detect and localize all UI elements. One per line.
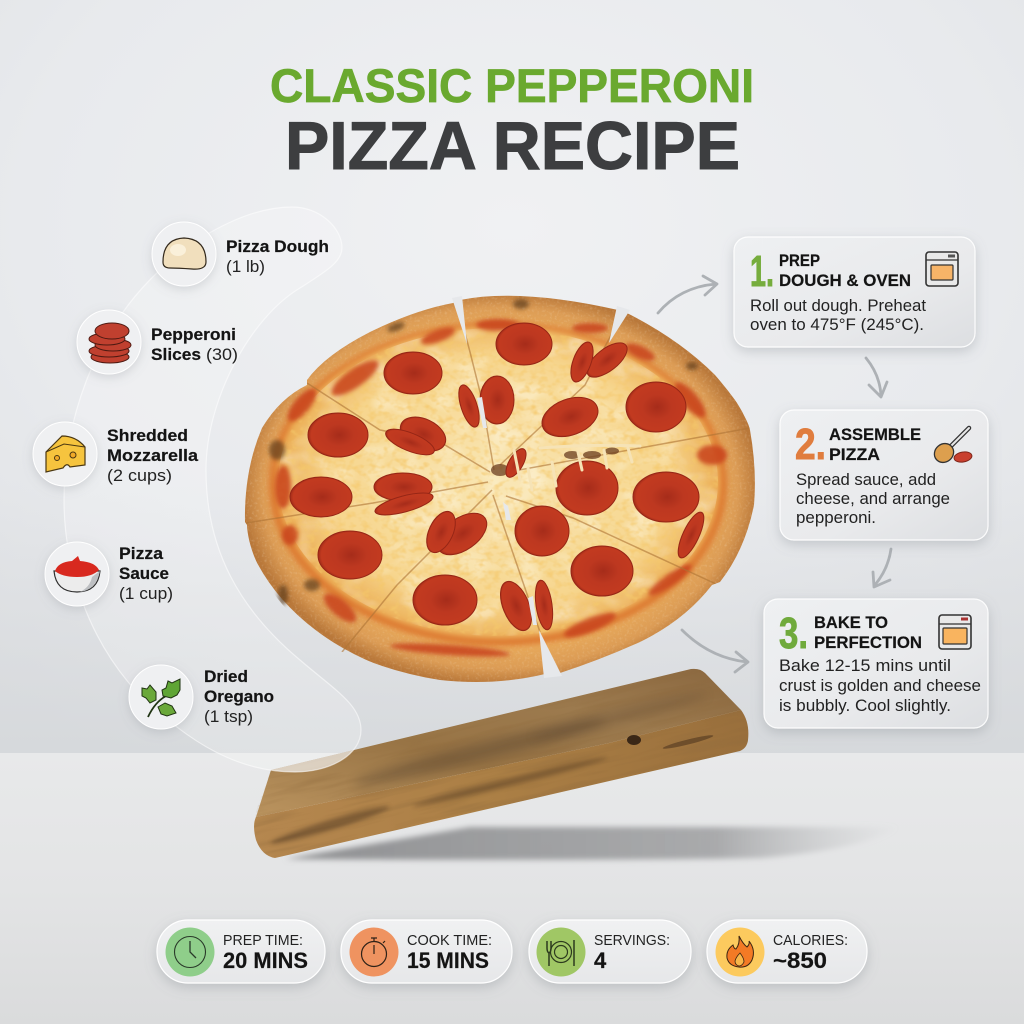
text: SERVINGS:: [594, 933, 670, 949]
text: ~850: [773, 948, 827, 973]
pepperoni slices: [290, 323, 709, 635]
step 3 text: Bake 12-15 mins until: [779, 657, 951, 675]
rim notches between slices: [452, 296, 630, 678]
icon: oven: [926, 252, 958, 286]
sauce patches: [275, 319, 727, 659]
translucent ingredient ribbon: [64, 207, 361, 772]
label: Pizza: [119, 545, 164, 563]
panel: step 2: [780, 410, 988, 540]
ingredient: pizza dough: [152, 222, 329, 286]
step 1 heading: PREP: [779, 252, 820, 270]
text: PREP TIME:: [223, 933, 303, 949]
ingredient: oregano: [129, 665, 274, 729]
panel: step 1: [734, 237, 975, 347]
stat: prep time: [157, 920, 325, 983]
step 2 text: pepperoni.: [796, 509, 876, 527]
ingredient: mozzarella: [33, 422, 199, 486]
text: COOK TIME:: [407, 933, 492, 949]
label: (1 cup): [119, 585, 173, 603]
icon: spoon with pepperoni: [931, 428, 973, 466]
floor shadow under board: [285, 827, 900, 860]
arrow: pizza to step 1: [658, 276, 717, 313]
arrow: step 2 to step 3: [873, 549, 891, 587]
step 1 heading: DOUGH & OVEN: [779, 272, 911, 290]
step 3 heading: BAKE TO: [814, 614, 888, 632]
cheese: [276, 326, 720, 638]
step 1 number: 1.: [750, 247, 774, 296]
ingredient: sauce: [45, 542, 173, 606]
char marks: [269, 299, 698, 605]
sauce ring: [269, 322, 727, 646]
title line: classic pepperoni: CLASSIC PEPPERONI: [270, 59, 754, 112]
step 2 heading: PIZZA: [829, 446, 880, 464]
panel: step 3: [764, 599, 988, 728]
icon: flame: [716, 928, 764, 976]
icon: stopwatch: [350, 928, 398, 976]
label: Mozzarella: [107, 447, 199, 465]
label: Shredded: [107, 427, 188, 445]
step 3 text: crust is golden and cheese: [779, 677, 981, 695]
cutting board: [254, 668, 748, 858]
frosted ribbon over board: [271, 750, 353, 772]
step 1 text: Roll out dough. Preheat: [750, 297, 926, 315]
arrow: step 1 to step 2: [866, 358, 887, 397]
board front edge: [254, 710, 748, 858]
cheese mottling: [279, 328, 718, 636]
text: CALORIES:: [773, 933, 848, 949]
label: Pepperoni: [151, 326, 236, 344]
label: (2 cups): [107, 467, 172, 485]
label: Dried: [204, 668, 248, 686]
text: 15 MINS: [407, 948, 489, 973]
step 2 number: 2.: [795, 420, 826, 469]
icon: pepperoni stack: [89, 323, 131, 363]
step 3 number: 3.: [779, 609, 808, 658]
icon: clock: [166, 928, 214, 976]
label: Sauce: [119, 565, 169, 583]
title line: pizza recipe: PIZZA RECIPE: [285, 108, 740, 184]
background wall: [0, 0, 1024, 753]
text: 4: [594, 948, 607, 973]
icon: oregano sprig: [142, 679, 180, 717]
step 2 text: Spread sauce, add: [796, 471, 936, 489]
step 3 heading: PERFECTION: [814, 634, 922, 652]
stat: servings: [529, 920, 691, 983]
melted cheese strands: [514, 445, 640, 490]
arrow: pizza to step 3: [682, 630, 748, 672]
icon: dough: [163, 238, 206, 269]
step 2 heading: ASSEMBLE: [829, 426, 921, 444]
text: 20 MINS: [223, 948, 308, 973]
label: (1 tsp): [204, 708, 253, 726]
step 2 text: cheese, and arrange: [796, 490, 950, 508]
label: Oregano: [204, 688, 274, 706]
label: Pizza Dough: [226, 238, 329, 256]
icon: plate and cutlery: [536, 928, 586, 976]
board top face: [256, 669, 741, 817]
label: (30): [206, 346, 238, 364]
slice cut lines: [246, 303, 750, 652]
icon: oven: [939, 615, 971, 649]
label: Slices: [151, 346, 201, 364]
icon: sauce bowl: [54, 556, 100, 592]
pizza: [238, 285, 762, 690]
step 3 text: is bubbly. Cool slightly.: [779, 697, 951, 715]
label: (1 lb): [226, 258, 265, 276]
icon: cheese: [46, 436, 85, 472]
title: [270, 59, 754, 184]
stat: calories: [707, 920, 867, 983]
dark holes between slices: [491, 448, 619, 476]
ingredient: pepperoni: [77, 310, 238, 374]
stat: cook time: [341, 920, 512, 983]
crust: [238, 288, 762, 688]
background floor: [0, 753, 1024, 1024]
step 1 text: oven to 475°F (245°C).: [750, 316, 924, 334]
